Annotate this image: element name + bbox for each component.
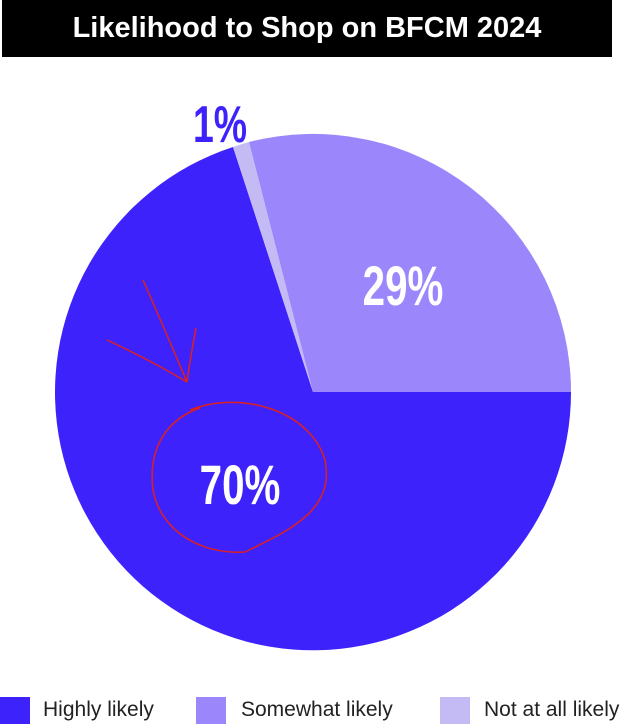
title: Likelihood to Shop on BFCM 2024	[73, 12, 541, 44]
slice: not at all likely	[233, 142, 313, 392]
label 70%: 70%	[200, 455, 280, 517]
title	[2, 0, 612, 57]
label 1%: 1%	[193, 95, 247, 153]
text: Somewhat likely	[241, 698, 393, 721]
text: Highly likely	[43, 698, 154, 721]
annotation: red circle	[152, 402, 326, 552]
slice: highly likely	[55, 147, 571, 650]
annotation: red arrow	[107, 280, 196, 382]
legend	[0, 697, 620, 724]
text: Not at all likely	[484, 698, 619, 721]
label 29%: 29%	[363, 256, 443, 318]
slice: somewhat likely	[249, 134, 571, 392]
